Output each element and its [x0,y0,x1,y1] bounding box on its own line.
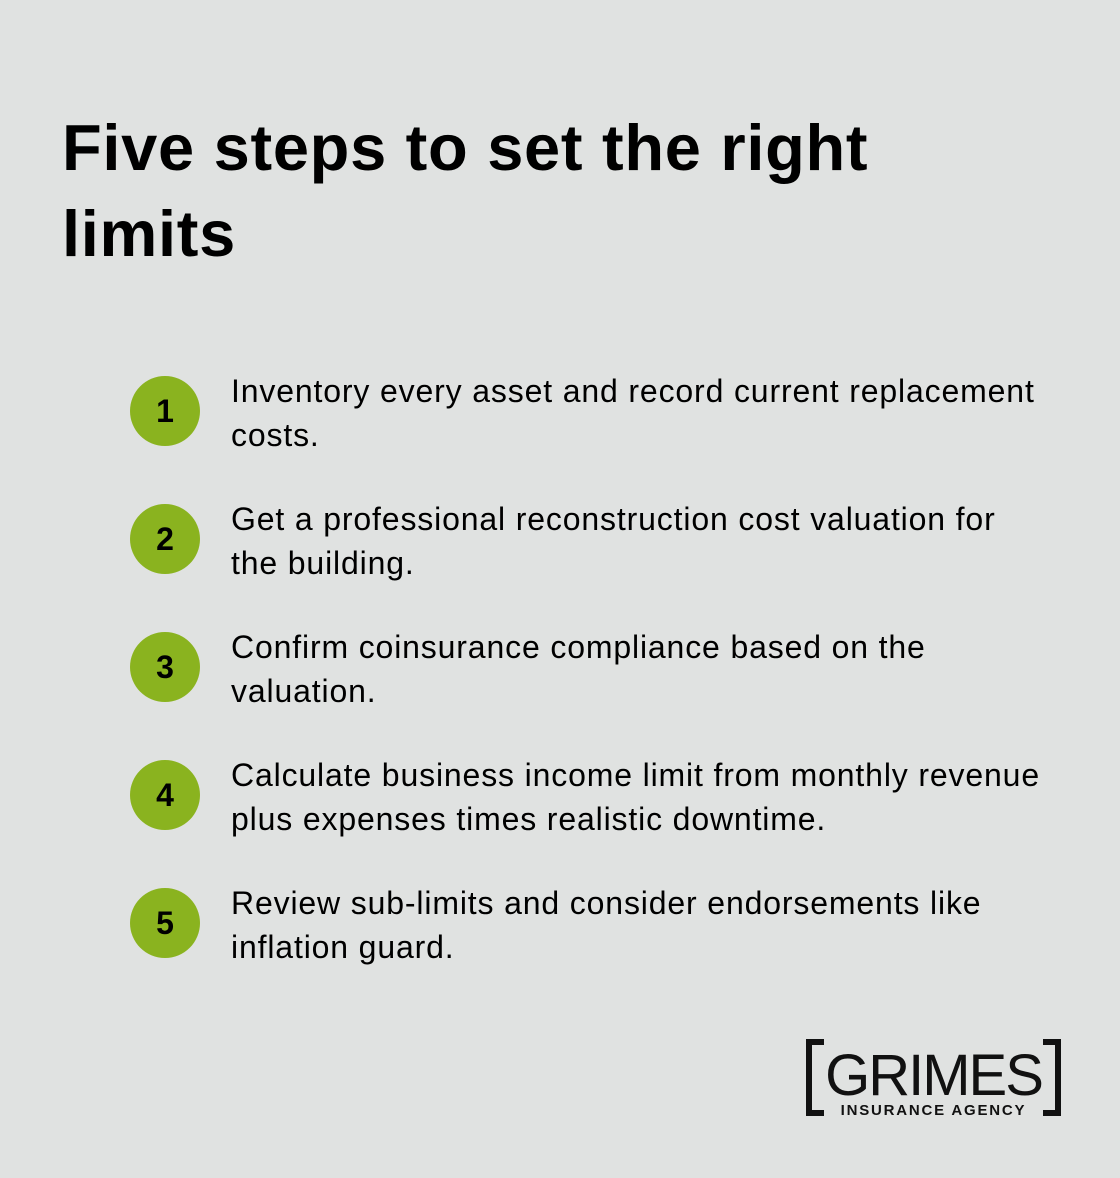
text: step 3: Confirm coinsurance compliance based on the [231,629,926,665]
icon: number 2 [130,504,200,574]
text: step 5 [231,885,981,965]
step 2 [130,501,996,581]
text: step 4: plus expenses times realistic downtime. [231,801,826,837]
text: step 3: valuation. [231,673,376,709]
icon: number 5: 5 [156,905,174,941]
icon: number 5 [130,888,200,958]
icon: number 2: 2 [156,521,174,557]
logo: GRIMES [825,1043,1042,1108]
title: Five steps to set the right [62,111,868,184]
icon: number 1: 1 [156,393,174,429]
text: step 5: Review sub-limits and consider endorsements like [231,885,981,921]
title: limits [62,197,236,270]
icon: number 3 [130,632,200,702]
text: step 4 [231,757,1040,837]
logo: INSURANCE AGENCY [841,1102,1026,1119]
logo [806,1039,1061,1119]
icon: number 4 [130,760,200,830]
text: step 1 [231,373,1035,453]
step 1 [130,373,1035,453]
step 3 [130,629,926,709]
text: step 2: the building. [231,545,415,581]
text: step 5: inflation guard. [231,929,455,965]
text: step 4: Calculate business income limit from monthly revenue [231,757,1040,793]
text: step 2 [231,501,996,581]
text: step 1: Inventory every asset and record current replacement [231,373,1035,409]
text: step 3 [231,629,926,709]
text: step 1: costs. [231,417,320,453]
text: step 2: Get a professional reconstruction cost valuation for [231,501,996,537]
title [62,111,868,270]
icon: number 4: 4 [156,777,174,813]
step 5 [130,885,981,965]
icon: number 1 [130,376,200,446]
icon: number 3: 3 [156,649,174,685]
step 4 [130,757,1040,837]
